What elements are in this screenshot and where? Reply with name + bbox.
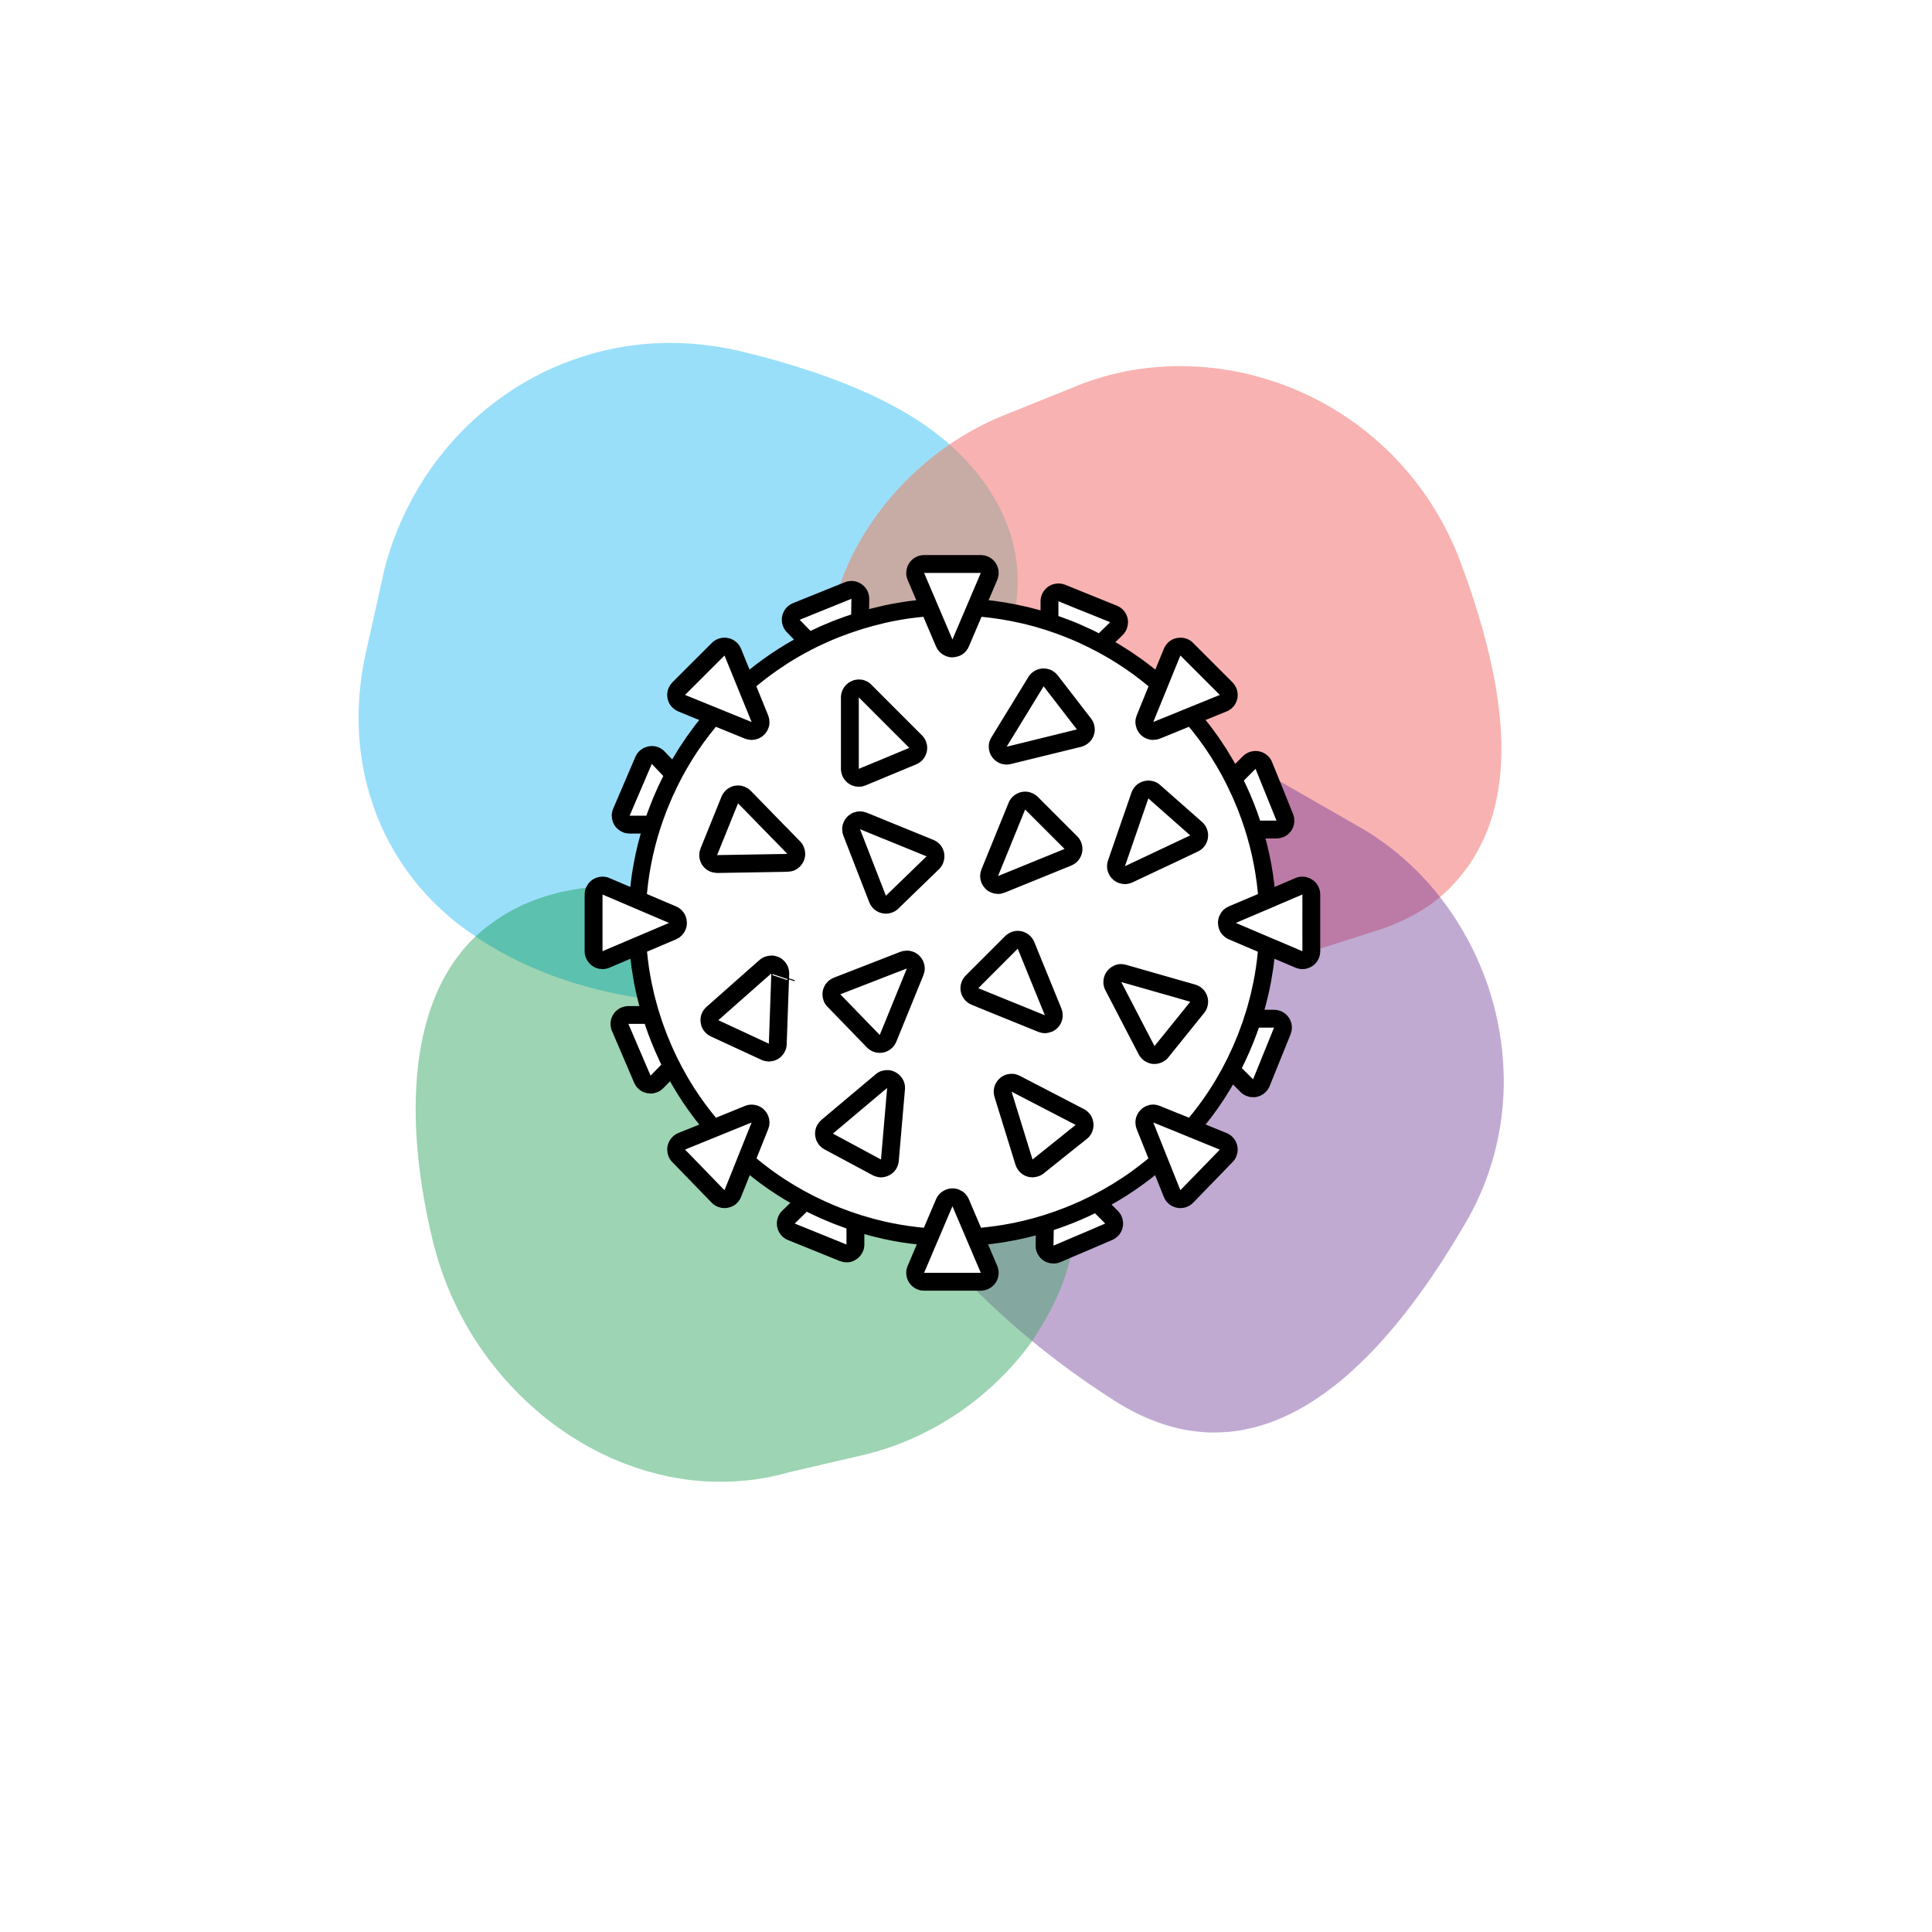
inner triangles	[717, 686, 1190, 1159]
illustration: virus on coloured blobs	[359, 343, 1504, 1482]
blob: purple	[976, 779, 1504, 1433]
overlap: blue and green	[476, 887, 637, 998]
overlap: green and purple	[977, 1235, 1070, 1342]
icon: virus	[603, 573, 1302, 1273]
blob: green	[416, 887, 1072, 1481]
overlap: blue and pink	[840, 444, 1018, 609]
blob: pink	[838, 366, 1502, 961]
virus body	[637, 607, 1268, 1238]
small spikes behind the virus body	[628, 599, 1277, 1246]
overlap: pink and purple	[1266, 781, 1440, 959]
blob: blue	[359, 343, 1018, 998]
large spikes	[603, 573, 1302, 1273]
